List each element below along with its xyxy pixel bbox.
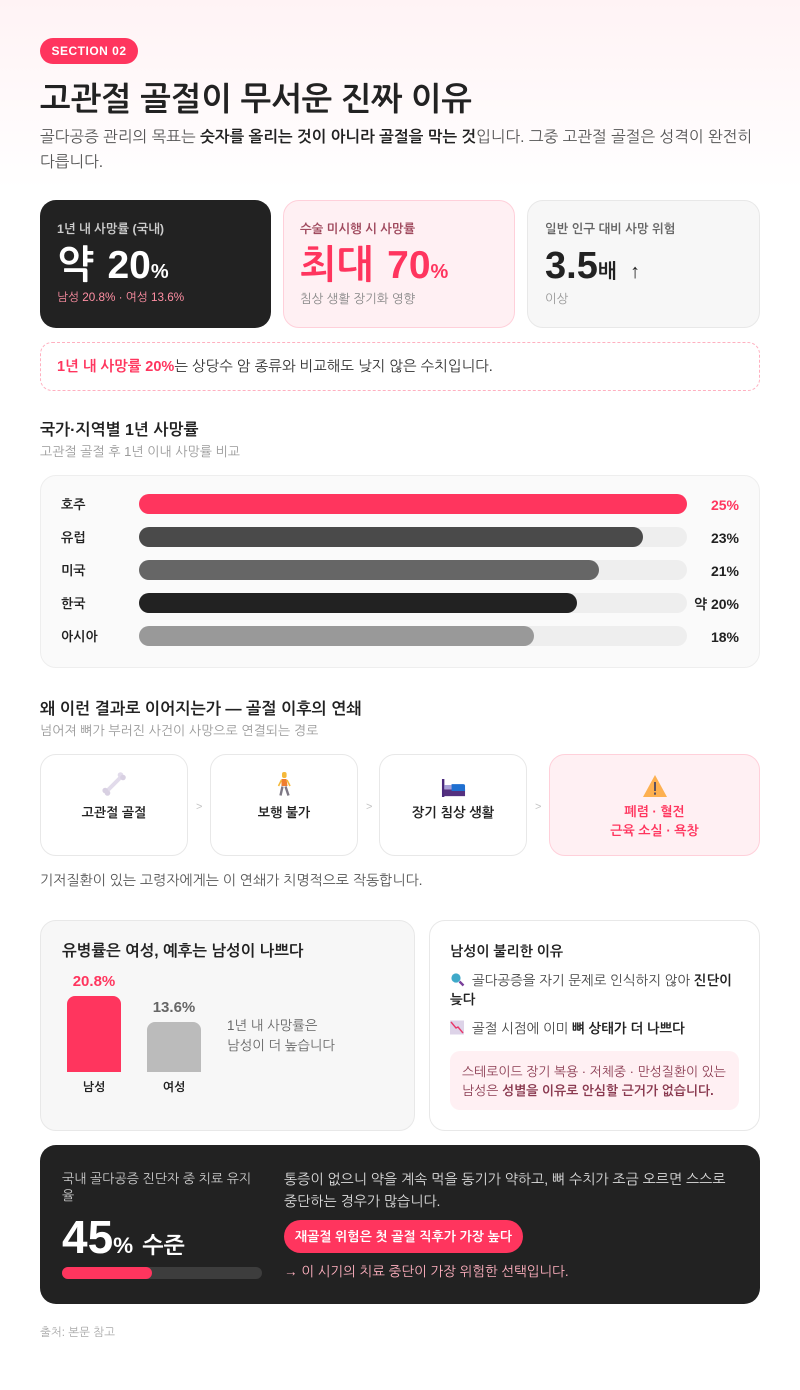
intro text [40,128,752,171]
side note: 1년 내 사망률은 [227,1018,317,1033]
icon: warning [643,775,667,797]
arrow: > [196,801,202,813]
explanation: 통증이 없으니 약을 계속 먹을 동기가 약하고, 뼈 수치가 조금 오르면 스스로 [284,1171,725,1187]
bar row: Asia [61,626,739,646]
step: complications: 근육 소실 · 욕창 [610,823,699,838]
warning note: 스테로이드 장기 복용 · 저체중 · 만성질환이 있는 [462,1064,726,1079]
bar row: Australia [61,494,739,514]
panel heading: 남성이 불리한 이유 [450,943,563,959]
reason 2: 골절 시점에 이미 뼈 상태가 더 나쁘다 [472,1021,685,1036]
chain note: 기저질환이 있는 고령자에게는 이 연쇄가 치명적으로 작동합니다. [40,872,423,888]
section badge: SECTION 02 [51,44,127,58]
highlight pill [284,1220,523,1253]
bar row: Australia: 호주 [61,497,85,512]
label: female: 여성 [163,1080,185,1094]
title: 고관절 골절이 무서운 진짜 이유 [40,81,472,117]
explanation: 중단하는 경우가 많습니다. [284,1193,440,1209]
arrow: > [366,801,372,813]
bar: male: 20.8% [73,973,115,990]
panel: why men fare worse [429,920,760,1131]
adherence number: 45% 수준 [62,1211,185,1263]
stat card: domestic mortality [40,200,271,328]
step: hip fracture [40,754,188,856]
callout: cancer comparison [40,342,760,391]
section badge [40,38,138,64]
side note [227,1018,335,1053]
reason 1 [450,973,732,1007]
step: unable to walk: 보행 불가 [258,805,310,820]
bar row: Korea: 약 20% [694,596,739,612]
step: complications: 폐렴 · 혈전 [624,804,685,819]
bar: male [67,973,121,1072]
stat card: no surgery mortality: 침상 생활 장기화 영향 [300,292,415,306]
icon: bed [442,779,466,797]
bar: female [147,999,201,1072]
panel: treatment adherence [40,1145,760,1304]
bar row: Korea [61,593,739,613]
adherence label: 국내 골다공증 진단자 중 치료 유지 [62,1171,251,1186]
warning note: 남성은 성별을 이유로 안심할 근거가 없습니다. [462,1083,714,1098]
adherence label: 율 [62,1188,74,1203]
stat card: no surgery mortality: 수술 미시행 시 사망률 [300,222,415,236]
bar row: Europe: 유럽 [61,530,85,545]
bar row: Europe [61,527,739,547]
bar chart: mortality by region [40,475,760,668]
stat card: no surgery mortality: 최대 70% [300,244,448,287]
bar row: Australia: 25% [711,497,739,513]
bar row: USA: 미국 [61,563,85,578]
stat card: domestic mortality: 남성 20.8% · 여성 13.6% [57,291,184,304]
adherence label [62,1171,251,1203]
stat card: relative risk [527,200,760,328]
intro text: 골다공증 관리의 목표는 숫자를 올리는 것이 아니라 골절을 막는 것입니다. 그중 고관절 골절은 성격이 완전히 [40,129,752,146]
stat card: relative risk: 3.5배 ↑ [545,245,640,287]
bar row: Asia: 18% [711,629,739,645]
stat card: domestic mortality: 약 20% [57,244,169,287]
icon: walking person [278,772,291,796]
source: 출처: 본문 참고 [40,1326,115,1339]
bar row: USA [61,560,739,580]
icon: bone [102,772,126,796]
bar row: Korea: 한국 [61,596,85,611]
heading: country comparison: 국가·지역별 1년 사망률 [40,422,198,439]
stat card: domestic mortality: 1년 내 사망률 (국내) [57,222,164,236]
subheading: country comparison: 고관절 골절 후 1년 이내 사망률 비교 [40,444,240,459]
bar: female: 13.6% [153,999,195,1016]
reason 1: 골다공증을 자기 문제로 인식하지 않아 진단이 [472,973,732,988]
highlight pill: 재골절 위험은 첫 골절 직후가 가장 높다 [295,1229,512,1244]
warning note [450,1051,739,1110]
side note: 남성이 더 높습니다 [227,1038,335,1053]
panel: sex comparison [40,920,415,1131]
stat card: relative risk: 일반 인구 대비 사망 위험 [545,222,675,236]
bar row: USA: 21% [711,563,739,579]
bar row: Europe: 23% [711,530,739,546]
adherence progress bar [62,1267,262,1279]
arrow: > [535,801,541,813]
panel heading: 유병률은 여성, 예후는 남성이 나쁘다 [62,943,304,960]
step: unable to walk [210,754,358,856]
label: male: 남성 [83,1080,105,1094]
stat card: relative risk: 이상 [545,292,568,306]
callout: cancer comparison: 1년 내 사망률 20%는 상당수 암 종류와 비교해도 낮지 않은 수치입니다. [57,359,493,375]
step: bed rest [379,754,527,856]
heading: chain of events: 왜 이런 결과로 이어지는가 — 골절 이후의 연쇄 [40,700,362,718]
step: bed rest: 장기 침상 생활 [412,805,494,820]
step: hip fracture: 고관절 골절 [82,805,146,820]
stat card: no surgery mortality [283,200,515,328]
explanation [284,1171,726,1209]
reason 1: 늦다 [450,992,475,1007]
bar row: Asia: 아시아 [61,629,98,644]
step: complications [549,754,760,856]
warning line: → 이 시기의 치료 중단이 가장 위험한 선택입니다. [284,1264,569,1279]
intro text: 다릅니다. [40,154,103,171]
subheading: chain of events: 넘어져 뼈가 부러진 사건이 사망으로 연결되는 경로 [40,723,318,738]
